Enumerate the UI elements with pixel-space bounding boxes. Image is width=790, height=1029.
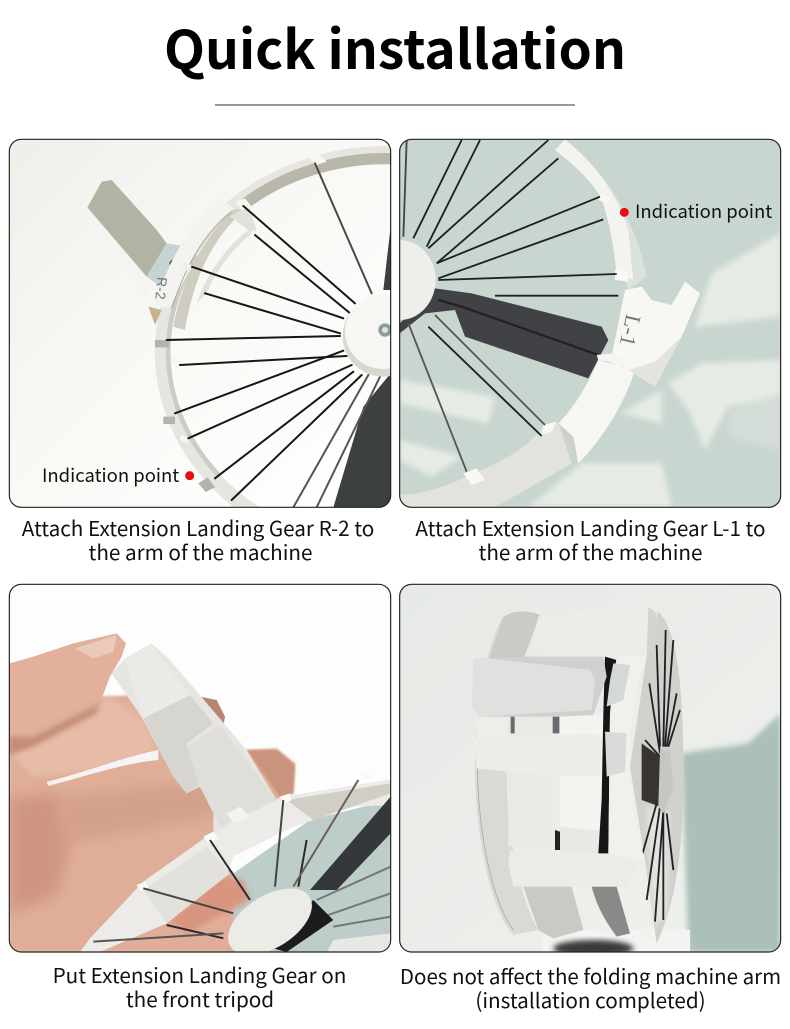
indication label: Indication point: [635, 198, 772, 224]
dark propeller blade: [400, 288, 608, 378]
caption: step 4: Does not affect the folding machine arm: [400, 960, 781, 990]
title: Quick installation: [164, 8, 626, 85]
caption: step 2: the arm of the machine: [479, 536, 702, 566]
wheel ring: [155, 146, 390, 507]
base: [684, 930, 690, 952]
icon: landing gear R-2: R-2: [152, 276, 170, 300]
dark propeller blade: [333, 227, 391, 507]
folded rings: [473, 611, 653, 943]
dark propeller blade: [310, 797, 391, 890]
caption: step 2: [415, 512, 766, 566]
caption: step 4: (installation completed): [475, 984, 706, 1014]
icon: gear foot bottom: [508, 850, 616, 887]
icon: gear foot third: [475, 738, 508, 772]
caption: step 2: Attach Extension Landing Gear L-1 to: [415, 512, 766, 542]
icon: landing gear L-1: L-1: [615, 312, 646, 349]
panel: attach gear R-2: [8, 138, 392, 508]
spokes: [93, 780, 391, 942]
icon: gear foot second: [472, 657, 595, 717]
spokes: [403, 140, 618, 472]
indication label: [620, 204, 772, 222]
panel: folded result: [400, 584, 781, 957]
spokes: [167, 163, 380, 507]
wheel ring: [80, 772, 391, 952]
caption: step 1: the arm of the machine: [89, 536, 312, 566]
background behind wheel: [227, 800, 391, 952]
wall shadow pattern: [400, 233, 781, 507]
wheel ring: [400, 139, 647, 507]
hand: [9, 633, 295, 952]
caption: step 3: Put Extension Landing Gear on: [53, 959, 346, 989]
icon: landing gear R-2: [82, 179, 233, 325]
panel: attach gear L-1: [364, 139, 781, 507]
caption: step 3: [53, 959, 346, 1013]
title underline: [215, 104, 575, 106]
icon: gear foot top: [533, 605, 657, 655]
caption: step 3: the front tripod: [126, 983, 274, 1013]
indication label: [44, 468, 194, 486]
hub: [364, 240, 436, 320]
icon: landing gear clip: [112, 643, 277, 833]
caption: step 1: Attach Extension Landing Gear R-2 to: [22, 512, 374, 542]
hub: [228, 888, 334, 952]
hub: [342, 308, 390, 377]
wheel with spokes: [630, 612, 683, 943]
caption: step 1: [22, 512, 374, 566]
indication label: Indication point: [42, 462, 179, 488]
icon: landing gear L-1: [597, 282, 700, 387]
caption: step 4: [400, 960, 781, 1014]
panel: fit on front tripod: [9, 584, 391, 968]
wall shadow: [682, 713, 781, 952]
